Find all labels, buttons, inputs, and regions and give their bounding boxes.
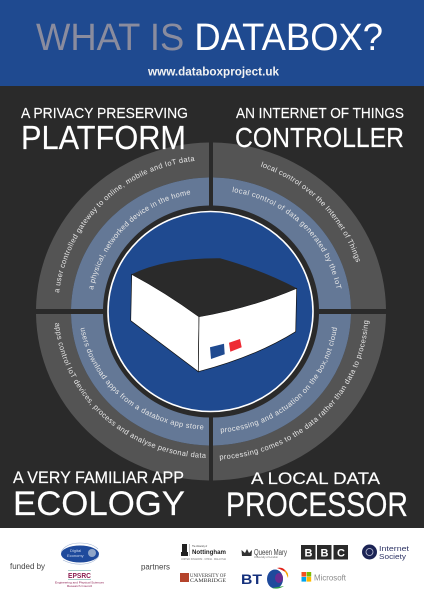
logo: microsoft: Microsoft (314, 574, 347, 582)
logo: bbc: B (304, 548, 312, 560)
panel: bottom-left quadrant: apps control IoT devices, process and analyse personal data (54, 323, 206, 458)
logo: nottingham (181, 544, 226, 561)
heading: controller: CONTROLLER (235, 122, 404, 153)
partners label: partners (141, 562, 170, 572)
panel: top-right quadrant: local control over the Internet of Things (261, 162, 360, 262)
logo: nottingham: The University of (192, 544, 207, 548)
heading: ecology: ECOLOGY (13, 485, 185, 523)
footer (0, 528, 424, 600)
heading: processor: A LOCAL DATA (251, 469, 381, 488)
logo: cambridge: CAMBRIDGE (190, 579, 226, 584)
website url: www.databoxproject.uk (147, 64, 279, 78)
logo: queen mary: University of London (254, 556, 279, 559)
funded by label: funded by (10, 562, 45, 571)
heading: controller (235, 105, 404, 153)
logo: bbc (301, 545, 348, 560)
logo: cambridge: UNIVERSITY OF (190, 574, 226, 579)
logo: internet society (362, 544, 410, 561)
title: WHAT IS DATABOX? (36, 17, 383, 59)
panel: bottom-right quadrant: processing comes to the data rather than data to processing (220, 320, 370, 461)
logo: cambridge (180, 573, 226, 584)
logo: internet society: Society (379, 552, 406, 561)
logo: bbc: C (337, 548, 345, 560)
logo: nottingham: UNITED KINGDOM · CHINA · MALAYSIA (181, 558, 226, 561)
panel: top-right quadrant: local control of data generated by the IoT (232, 186, 342, 288)
heading: ecology: A VERY FAMILIAR APP (13, 468, 184, 487)
logo: queen mary (242, 548, 287, 559)
heading: platform: PLATFORM (21, 120, 186, 157)
heading: controller: AN INTERNET OF THINGS (236, 105, 404, 122)
logo: digital economy: Digital (70, 548, 81, 553)
dark main panel (0, 86, 424, 528)
panel: top-left quadrant: a physical, networked device in the home (90, 190, 190, 290)
panel: top-left quadrant: a user controlled gateway to online, mobile and IoT data (55, 156, 195, 292)
heading: ecology (13, 468, 185, 523)
heading: platform: A PRIVACY PRESERVING (21, 105, 188, 122)
panel: top-left quadrant (36, 142, 209, 309)
logo: digital economy: Economy (67, 553, 84, 558)
logo: bt: BT (241, 571, 262, 587)
heading: processor (226, 469, 408, 524)
heading: platform (21, 105, 188, 157)
logo: internet society: Internet (379, 544, 410, 553)
logo: epsrc (55, 570, 105, 588)
panel: bottom-right quadrant: processing and actuation on the box,not cloud (220, 327, 337, 434)
central blue circle (108, 212, 313, 412)
icon: databox (131, 258, 297, 372)
logo: epsrc: Research Council (67, 584, 92, 588)
header band (0, 0, 424, 86)
panel: top-right quadrant (213, 142, 386, 309)
logo: nottingham: Nottingham (192, 550, 226, 556)
logo: queen mary: Queen Mary (254, 548, 287, 557)
logo: bt (241, 568, 288, 589)
logo: epsrc: EPSRC (68, 573, 91, 580)
logo: epsrc: Engineering and Physical Sciences (55, 580, 105, 584)
logo: microsoft (302, 572, 347, 582)
logo: bbc: B (320, 548, 328, 560)
logo: digital economy (61, 543, 99, 564)
panel: bottom-left quadrant: users download apps from a databox app store (80, 328, 204, 430)
